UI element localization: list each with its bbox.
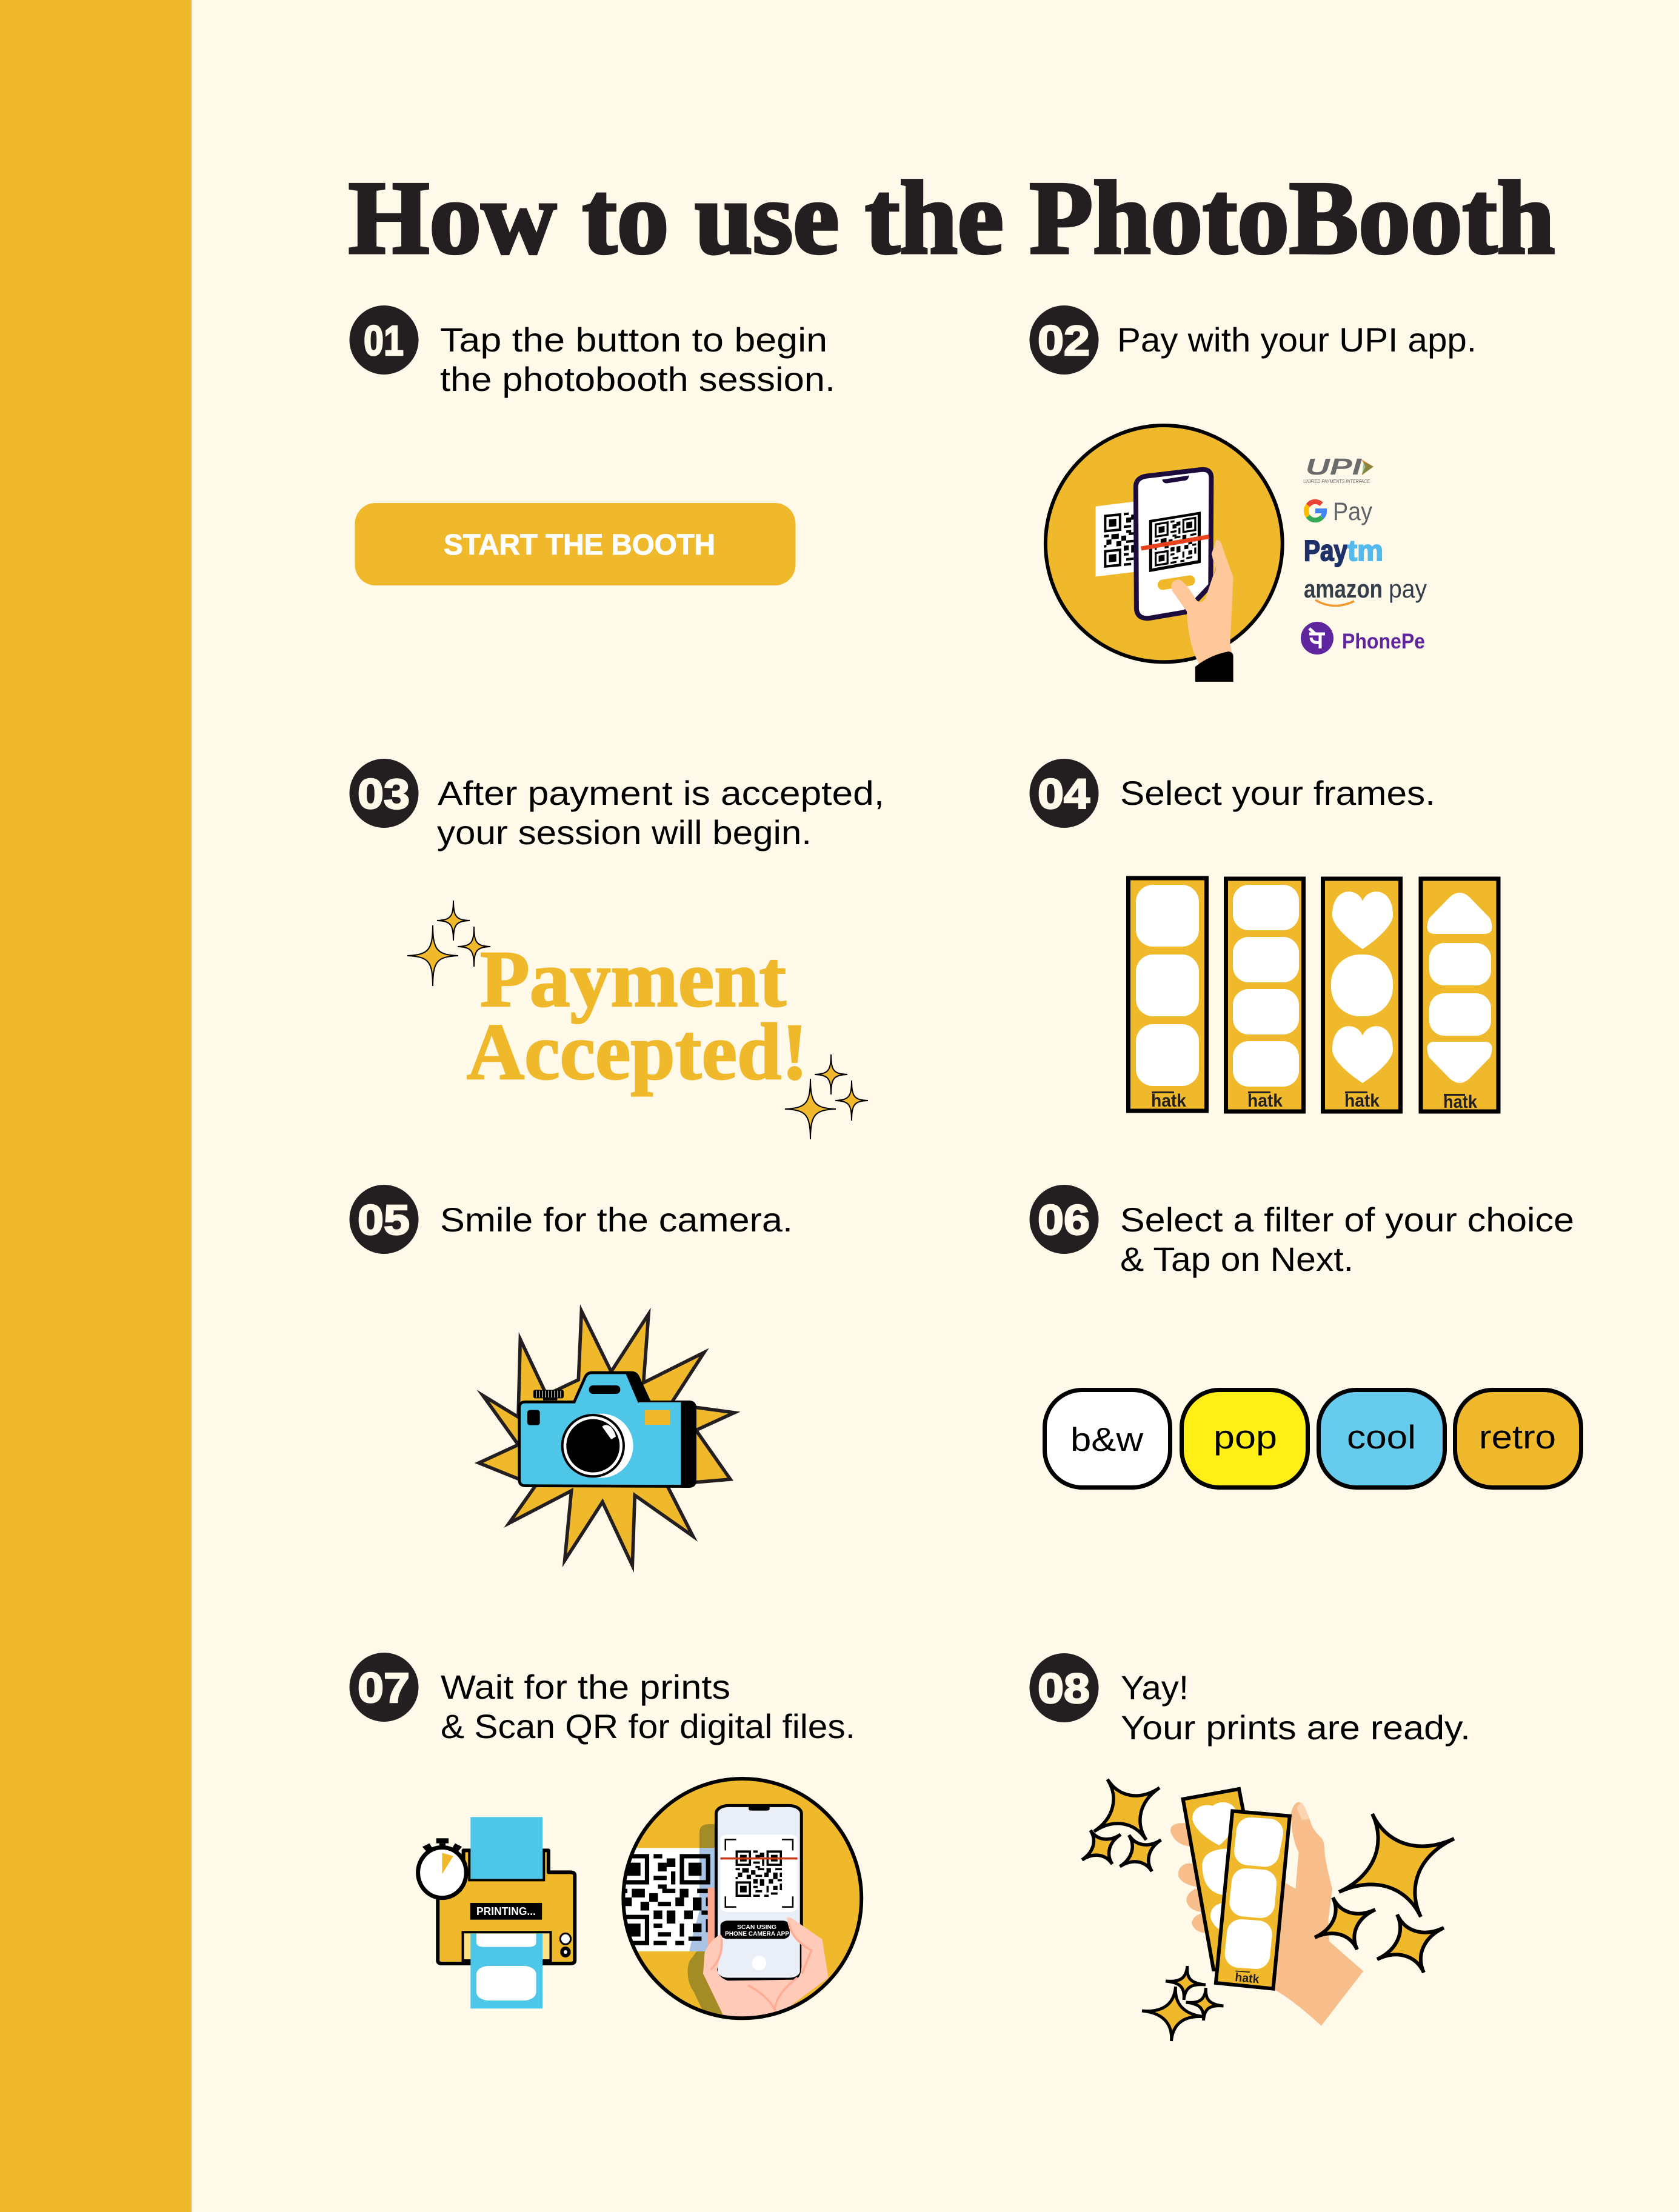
logo: UPI: UNIFIED PAYMENTS INTERFACE <box>1303 478 1370 484</box>
logo: Paytm <box>1304 535 1383 567</box>
step 7 panel <box>349 1653 861 2019</box>
step 2 text: Pay with your UPI app. <box>1117 321 1477 359</box>
illustration: camera on starburst <box>479 1311 735 1565</box>
badge 06: 06 <box>1038 1196 1090 1244</box>
step 1 text: the photobooth session. <box>440 360 835 398</box>
illustration: scanning QR with phone <box>616 1779 861 2019</box>
badge 05: 05 <box>358 1196 410 1244</box>
badge 04: 04 <box>1038 770 1090 818</box>
badge 08: 08 <box>1038 1665 1090 1712</box>
frame strip 4: hatk <box>1443 1092 1477 1112</box>
frame strip 1 <box>1129 878 1206 1111</box>
printing label: PRINTING... <box>476 1905 536 1917</box>
logo: amazon pay: amazon <box>1304 575 1383 603</box>
badge 02 <box>1029 305 1098 375</box>
sparkles lower group <box>1140 1964 1224 2044</box>
badge 07: 07 <box>358 1664 410 1711</box>
step 7 text: Wait for the prints <box>441 1668 730 1706</box>
step 6 text <box>1120 1201 1574 1278</box>
logo: Google Pay <box>1306 497 1372 525</box>
frame strip 3: hatk <box>1344 1091 1380 1111</box>
step 1 text: Tap the button to begin <box>440 321 827 359</box>
title: How to use the PhotoBooth <box>349 161 1555 276</box>
filter b&w <box>1045 1390 1170 1487</box>
step 1 text <box>440 321 835 398</box>
step 3 panel <box>349 759 884 1139</box>
badge 03 <box>349 759 418 828</box>
step 6 text: & Tap on Next. <box>1120 1240 1354 1278</box>
step 1 panel <box>349 305 835 585</box>
logo: PhonePe <box>1301 622 1425 655</box>
step 3 text: After payment is accepted, <box>438 774 884 812</box>
step 4 panel <box>1029 759 1498 1112</box>
logo: PhonePe: PhonePe <box>1342 630 1425 653</box>
frame strip 1: hatk <box>1151 1091 1186 1111</box>
badge 06 <box>1029 1185 1098 1254</box>
scan label <box>725 1924 789 1937</box>
filter retro <box>1455 1390 1581 1487</box>
step 3 text <box>437 774 884 851</box>
sparkles top-left <box>407 901 490 986</box>
frame strip 4 <box>1421 879 1498 1112</box>
sparkles right group <box>1303 1787 1478 1988</box>
sparkles bottom-right <box>785 1054 868 1139</box>
illustration: phone scanning QR <box>1046 425 1283 682</box>
filter b&w: b&w <box>1070 1421 1143 1458</box>
badge 05 <box>349 1185 418 1254</box>
payment accepted headline: Payment <box>480 934 786 1024</box>
step 6 text: Select a filter of your choice <box>1120 1201 1574 1239</box>
logo: Google Pay: Pay <box>1333 497 1372 525</box>
start button: START THE BOOTH <box>444 529 715 561</box>
step 4 text: Select your frames. <box>1120 774 1435 812</box>
step 8 text: Your prints are ready. <box>1121 1708 1470 1747</box>
step 2 panel <box>1029 305 1477 682</box>
filter retro: retro <box>1479 1418 1556 1456</box>
step 6 panel <box>1029 1185 1581 1487</box>
step 5 text: Smile for the camera. <box>440 1201 793 1239</box>
step 7 text: & Scan QR for digital files. <box>441 1707 855 1745</box>
logo: Paytm: tm <box>1347 535 1383 567</box>
payment accepted headline: Accepted! <box>467 1007 808 1096</box>
badge 08 <box>1029 1653 1098 1722</box>
step 8 panel <box>1029 1653 1478 2044</box>
frame strip 2: hatk <box>1247 1091 1283 1111</box>
step 8 text: Yay! <box>1121 1668 1189 1707</box>
scan label: SCAN USING <box>737 1924 776 1931</box>
badge 04 <box>1029 759 1098 828</box>
illustration: hand holding prints <box>1170 1789 1363 2026</box>
logo: amazon pay: pay <box>1389 575 1427 603</box>
badge 01 <box>349 305 418 375</box>
step 8 text <box>1121 1668 1470 1747</box>
filter cool: cool <box>1347 1418 1416 1456</box>
frame strip 3 <box>1323 879 1400 1111</box>
badge 07 <box>349 1653 418 1722</box>
step 7 text <box>441 1668 855 1745</box>
filter pop <box>1182 1390 1308 1487</box>
badge 03: 03 <box>358 770 410 818</box>
hatk logo: hatk <box>1235 1971 1260 1987</box>
badge 02: 02 <box>1038 317 1090 364</box>
logo: Paytm: Pay <box>1304 535 1347 567</box>
step 5 panel <box>349 1185 793 1565</box>
left yellow sidebar <box>0 0 192 2212</box>
logo: UPI: UPI <box>1306 455 1363 480</box>
sparkles upper-left group <box>1071 1757 1179 1885</box>
filter cool <box>1319 1390 1445 1487</box>
step 3 text: your session will begin. <box>437 813 812 851</box>
payment accepted headline <box>467 934 808 1096</box>
filter pop: pop <box>1213 1418 1277 1456</box>
badge 01: 01 <box>364 317 404 364</box>
frame strip 2 <box>1226 879 1303 1111</box>
logo: UPI <box>1303 455 1374 484</box>
illustration: printer with stopwatch <box>418 1817 575 2008</box>
scan label: PHONE CAMERA APP <box>725 1930 789 1937</box>
start button <box>355 503 795 585</box>
